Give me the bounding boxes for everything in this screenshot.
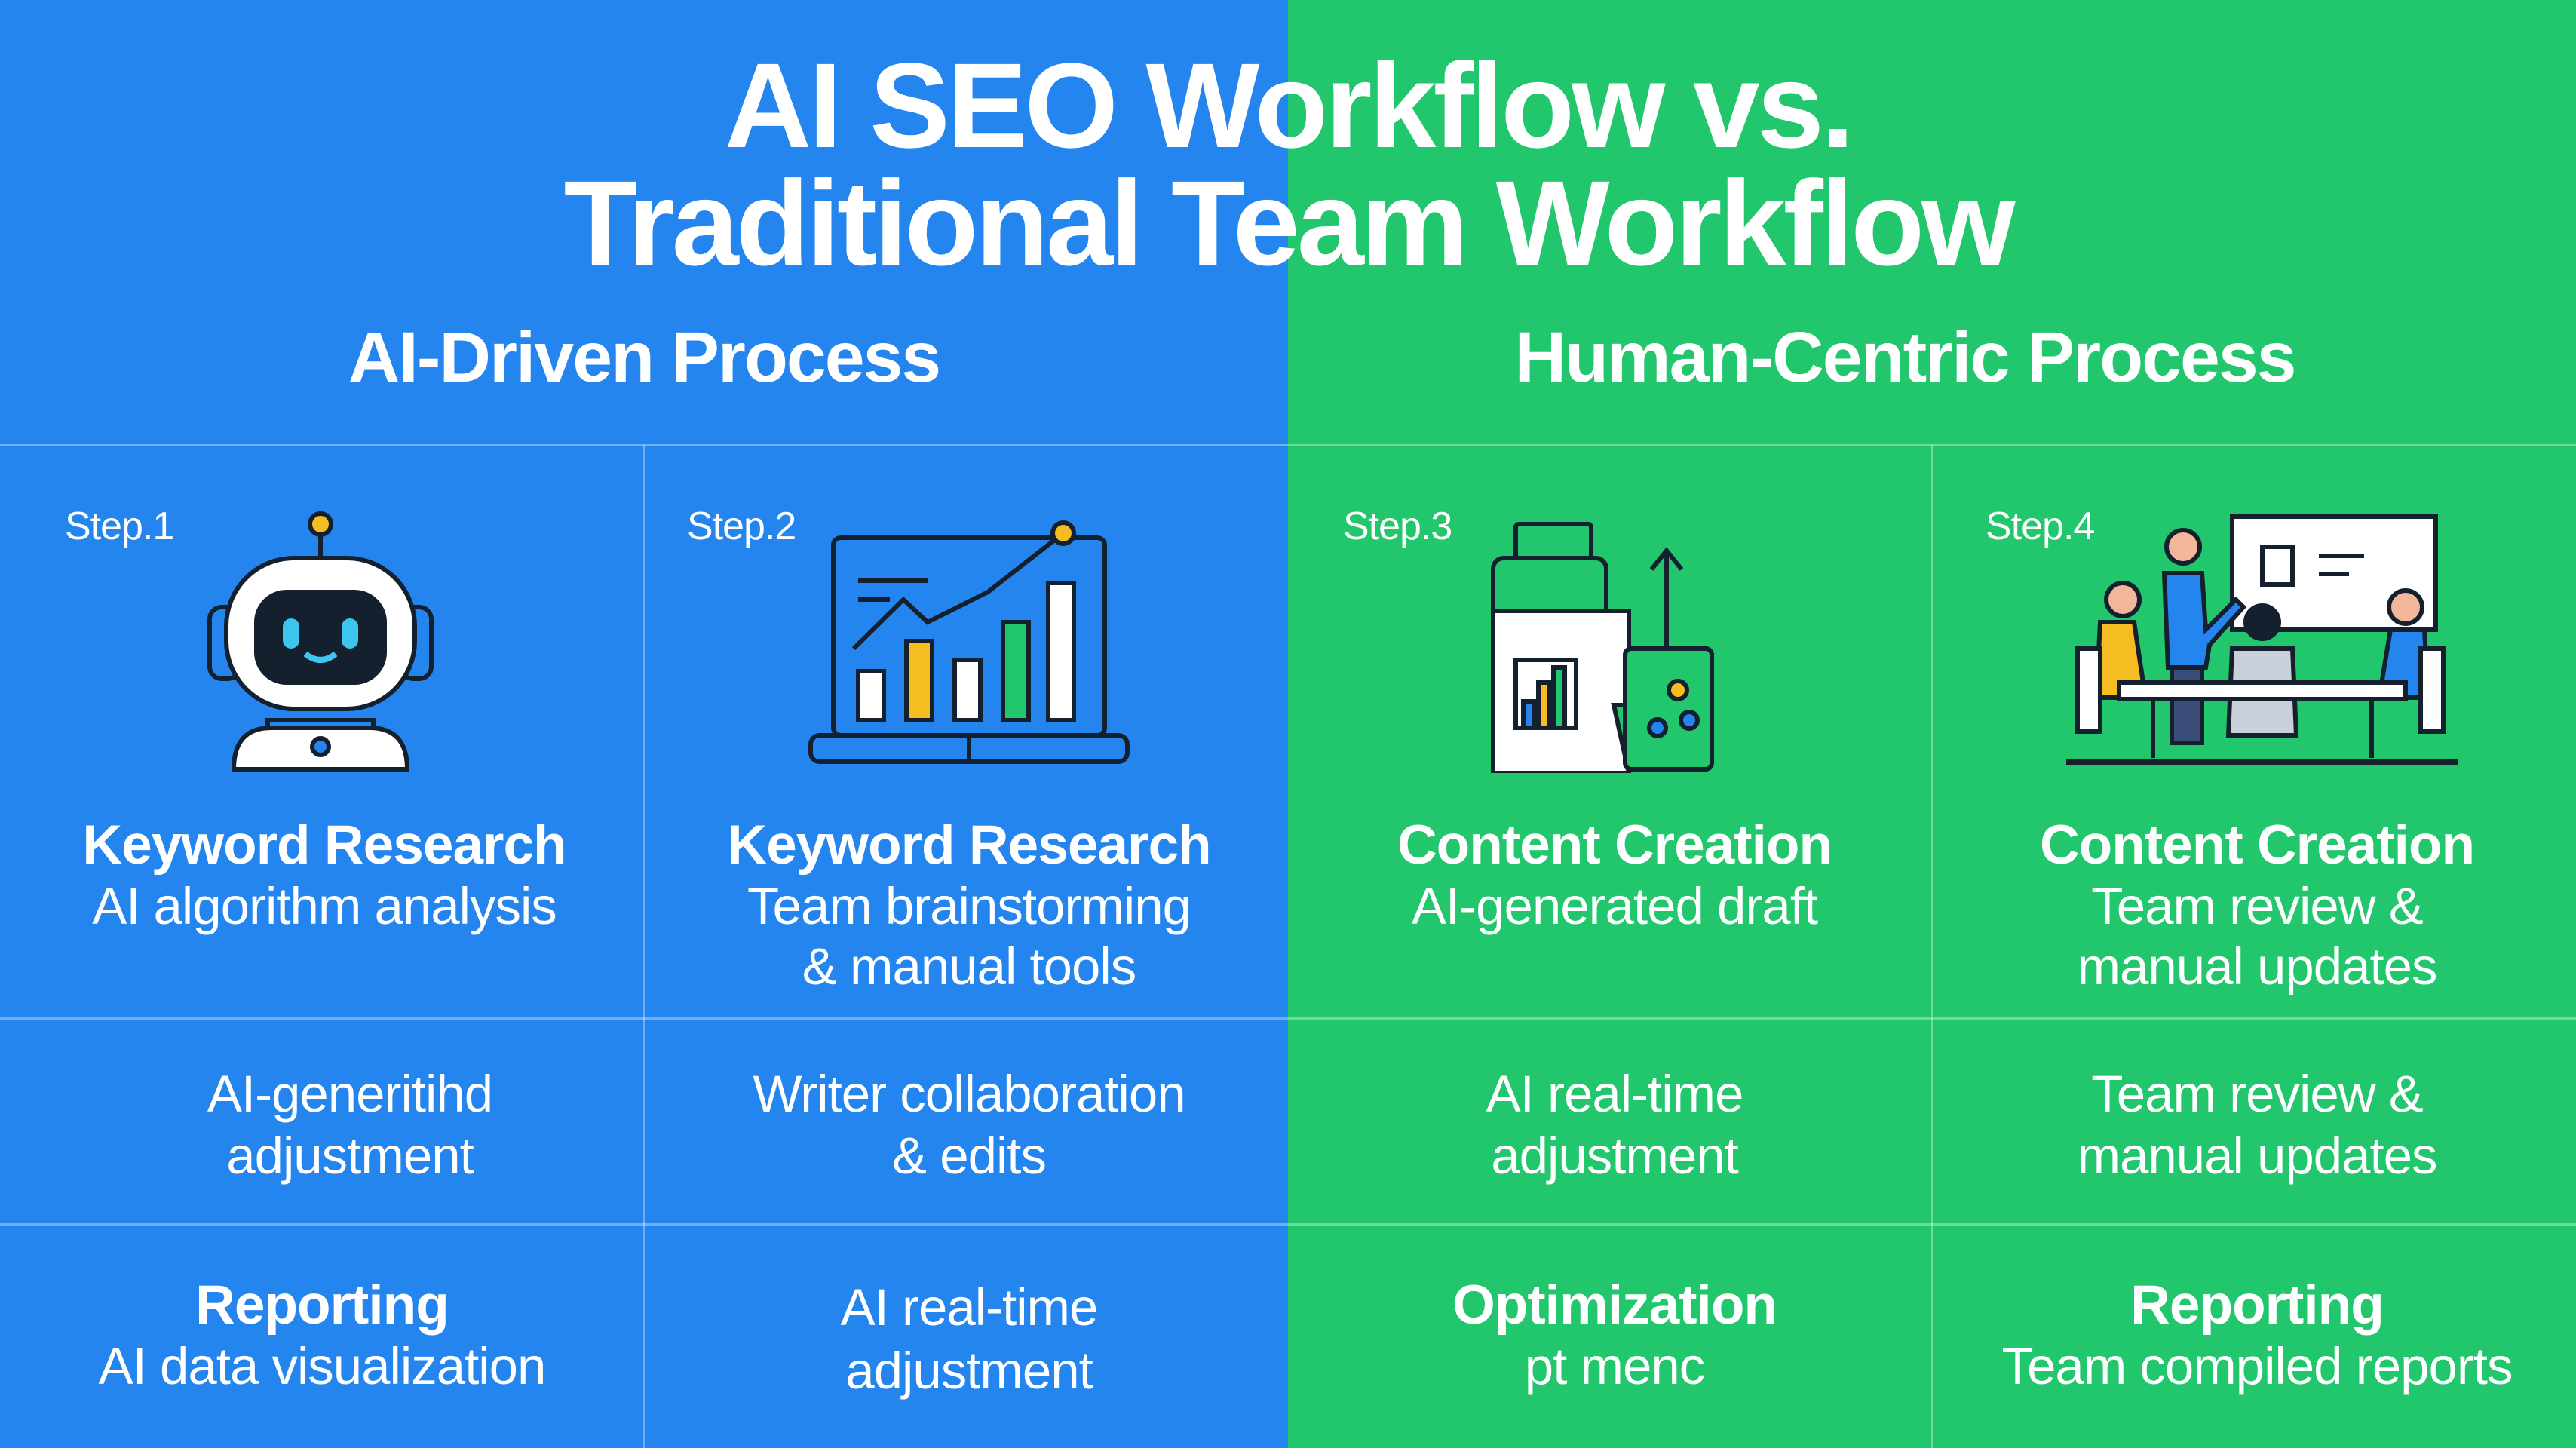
title: Traditional Team Workflow: [563, 155, 2013, 290]
row2 col2: [753, 1065, 1185, 1185]
row2 col1: AI-generitihd: [207, 1065, 492, 1123]
step label 3: Step.3: [1343, 505, 1452, 548]
row2 col1: adjustment: [226, 1127, 474, 1185]
icon: team meeting: [2066, 514, 2458, 765]
cell: step4: manual updates: [2077, 937, 2437, 996]
row2 col2: Writer collaboration: [753, 1065, 1185, 1123]
cell: step1: AI algorithm analysis: [92, 877, 557, 935]
step label 2: Step.2: [687, 505, 796, 548]
step label 4: Step.4: [1986, 505, 2094, 548]
cell: step4: Team review &: [2091, 877, 2423, 935]
row2 col3: AI real-time: [1486, 1065, 1743, 1123]
row3 col4: [2002, 1275, 2512, 1395]
step label 1: Step.1: [65, 505, 173, 548]
row3 col4: Reporting: [2130, 1275, 2384, 1336]
icon: robot: [207, 511, 434, 772]
row3 col2: AI real-time: [841, 1278, 1097, 1336]
cell: step2: Keyword Research: [727, 814, 1211, 876]
cell: step1: [82, 814, 566, 935]
row3 col1: [98, 1275, 545, 1395]
row2 col4: Team review &: [2091, 1065, 2423, 1123]
row3 col2: adjustment: [845, 1342, 1093, 1400]
row3 col2: [840, 1278, 1097, 1400]
cell: step3: [1397, 814, 1832, 935]
cell: step3: AI-generated draft: [1412, 877, 1817, 935]
cell: step4: [2040, 814, 2474, 996]
icon: chart laptop: [808, 520, 1130, 764]
row3 col1: Reporting: [195, 1275, 449, 1336]
cell: step2: Team brainstorming: [747, 877, 1191, 935]
row3 col3: Optimization: [1452, 1275, 1777, 1336]
row3 col3: [1452, 1275, 1777, 1395]
row2 col2: & edits: [892, 1127, 1046, 1185]
cell: step2: & manual tools: [802, 937, 1136, 996]
cell: step2: [727, 814, 1211, 996]
cell: step1: Keyword Research: [82, 814, 566, 876]
title: AI SEO Workflow vs.: [725, 38, 1851, 173]
heading: Human-Centric Process: Human-Centric Process: [1514, 318, 2295, 397]
row2 col4: manual updates: [2077, 1127, 2437, 1185]
row2 col4: [2077, 1065, 2437, 1185]
row2 col1: [207, 1065, 492, 1185]
row3 col1: AI data visualization: [99, 1337, 545, 1395]
icon: content doc: [1491, 522, 1714, 773]
title: [563, 38, 2016, 290]
cell: step3: Content Creation: [1397, 814, 1832, 876]
row2 col3: [1486, 1065, 1743, 1185]
row2 col3: adjustment: [1491, 1127, 1738, 1185]
row3 col4: Team compiled reports: [2002, 1337, 2512, 1395]
cell: step4: Content Creation: [2040, 814, 2474, 876]
row3 col3: pt menc: [1525, 1337, 1704, 1395]
heading: AI-Driven Process: AI-Driven Process: [348, 318, 940, 397]
